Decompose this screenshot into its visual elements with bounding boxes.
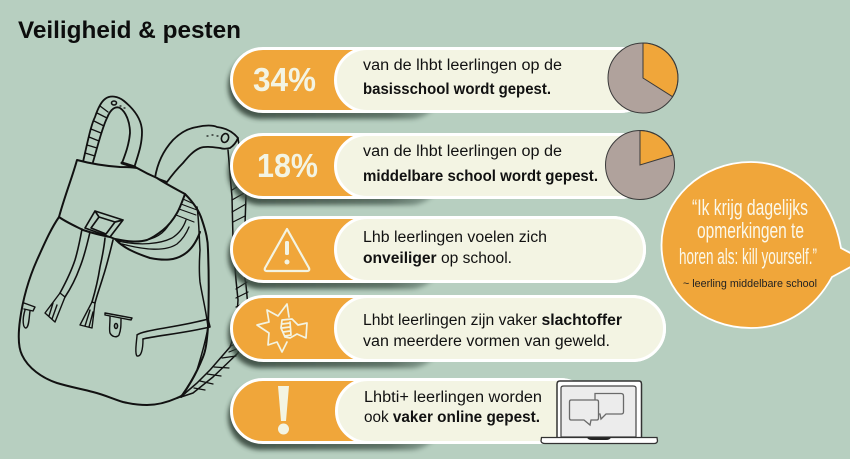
flap (59, 160, 185, 242)
icon: warning triangle (265, 229, 309, 271)
card: less safe: onveiliger op school. (363, 250, 512, 267)
icon: fist with burst (257, 304, 307, 352)
card: 18% bullied (228, 130, 674, 205)
shadow (228, 53, 443, 119)
pill text area (336, 296, 664, 360)
icon: exclamation mark (278, 386, 289, 434)
shoulder strap (155, 126, 238, 182)
icon: backpack (19, 97, 248, 405)
card: victim of violence: van meerdere vormen van geweld. (363, 333, 610, 350)
big number: 18% (257, 147, 318, 184)
quote attribution: ~ leerling middelbare school (683, 278, 817, 290)
card: less safe (228, 218, 644, 289)
pie chart 18% (606, 130, 674, 200)
shadow (228, 139, 443, 205)
card: online bullying (228, 380, 658, 450)
clasp (105, 313, 132, 320)
card: 34% bullied (228, 43, 678, 119)
top handle (83, 97, 142, 165)
card text: Lhbti+ leerlingen worden (364, 389, 542, 406)
pill text area (336, 134, 652, 198)
tassel straps (60, 229, 113, 303)
buckle (85, 211, 123, 237)
shadow (228, 222, 443, 289)
back strap (183, 150, 238, 395)
pill outer (232, 218, 644, 282)
inner pocket folds (116, 232, 200, 260)
pill outer (232, 134, 652, 198)
shadow (228, 301, 443, 368)
body (19, 217, 185, 405)
front pocket (137, 319, 210, 339)
pill outer (232, 380, 592, 442)
card text: Lhbt leerlingen zijn vaker slachtoffer (363, 312, 622, 329)
card: 34% bullied: basisschool wordt gepest. (363, 81, 551, 98)
card: online bullying: ook vaker online gepest. (364, 409, 540, 426)
bubble shape (662, 162, 850, 328)
side zip (23, 303, 35, 328)
card text: Lhb leerlingen voelen zich (363, 229, 547, 246)
card: 18% bullied: middelbare school wordt gepest. (363, 168, 598, 185)
big number: 34% (253, 61, 316, 98)
pill outer (232, 48, 652, 112)
pill text area (336, 380, 592, 442)
icon: laptop with chat bubbles (541, 381, 658, 444)
card text: van de lhbt leerlingen op de (363, 57, 562, 74)
pill outer (232, 296, 664, 360)
pill text area (336, 48, 652, 112)
card text: van de lhbt leerlingen op de (363, 143, 562, 160)
pill text area (336, 218, 644, 282)
quote text: “Ik krijg dagelijks (692, 195, 808, 220)
title: Veiligheid & pesten (18, 17, 241, 44)
card: victim of violence (228, 296, 664, 368)
pie chart 34% (608, 43, 678, 113)
shadow (228, 384, 443, 450)
quote text: opmerkingen te (697, 218, 804, 243)
speech bubble quote (662, 162, 850, 328)
